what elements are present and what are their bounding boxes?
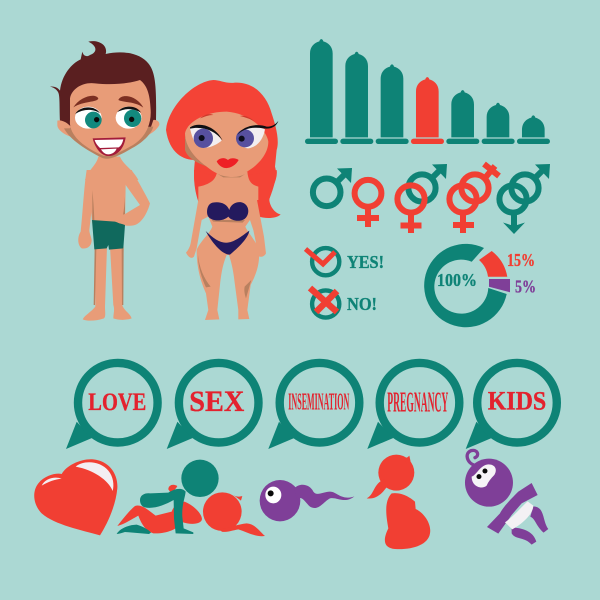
icon: cross (310, 288, 339, 318)
character: boy (50, 41, 159, 321)
icon: female pair (449, 164, 499, 233)
donut chart (424, 244, 536, 327)
bar 5 (446, 90, 479, 144)
icon: sperm (260, 480, 354, 521)
red head with ponytail (203, 492, 242, 531)
icon: couple (117, 460, 265, 536)
icon: baby (465, 450, 548, 545)
speech bubble: kids: KIDS (488, 385, 546, 415)
speech bubble: love: LOVE (88, 389, 146, 416)
girl back hair (166, 80, 278, 202)
text: INSEMINATION (288, 389, 350, 415)
boy eyebrows (73, 96, 143, 108)
teal figure (117, 525, 151, 534)
label: 100%: 100% (437, 270, 477, 290)
bar 3 (376, 64, 409, 144)
icon: male and female pair (397, 164, 447, 233)
speech bubble: pregnancy (367, 363, 459, 449)
boy body (78, 170, 150, 321)
girl bikini bottom (206, 231, 249, 255)
speech bubble: kids (466, 363, 557, 449)
text: PREGNANCY (387, 388, 448, 419)
chart: condom bars (305, 39, 550, 144)
girl head (185, 112, 278, 200)
speech bubble: sex (167, 363, 258, 449)
icon: check (306, 248, 339, 275)
character: girl (166, 80, 281, 320)
bar 2 (340, 52, 373, 144)
bar 7 (517, 115, 550, 144)
boy eyes (75, 107, 142, 129)
girl eyes (190, 121, 278, 148)
red figure (117, 502, 202, 533)
slice 15% (479, 251, 507, 277)
label: yes: YES! (347, 252, 384, 272)
slice 5% (489, 279, 510, 292)
girl bikini top (207, 202, 248, 221)
speech bubble: love (66, 363, 158, 449)
icon: pregnant woman (367, 455, 430, 549)
donut ring (424, 244, 507, 327)
icon: male pair (499, 164, 550, 234)
boy head (50, 41, 159, 180)
gender symbols (313, 164, 550, 234)
no option (310, 288, 377, 318)
icon: male (313, 168, 352, 206)
yes option (306, 248, 384, 275)
speech bubble: sex: SEX (189, 385, 245, 418)
bar 4 highlighted (411, 77, 444, 144)
speech bubble: insemination (268, 363, 359, 449)
girl lips (217, 158, 239, 168)
label: 15%: 15% (507, 250, 535, 270)
label: 5%: 5% (515, 277, 536, 297)
bar 6 (482, 103, 515, 144)
icon: heart (34, 459, 117, 535)
bar 1 (305, 39, 338, 144)
label: no: NO! (347, 294, 377, 314)
boy smile (93, 137, 126, 156)
girl body (186, 177, 266, 320)
icon: female (355, 180, 381, 227)
